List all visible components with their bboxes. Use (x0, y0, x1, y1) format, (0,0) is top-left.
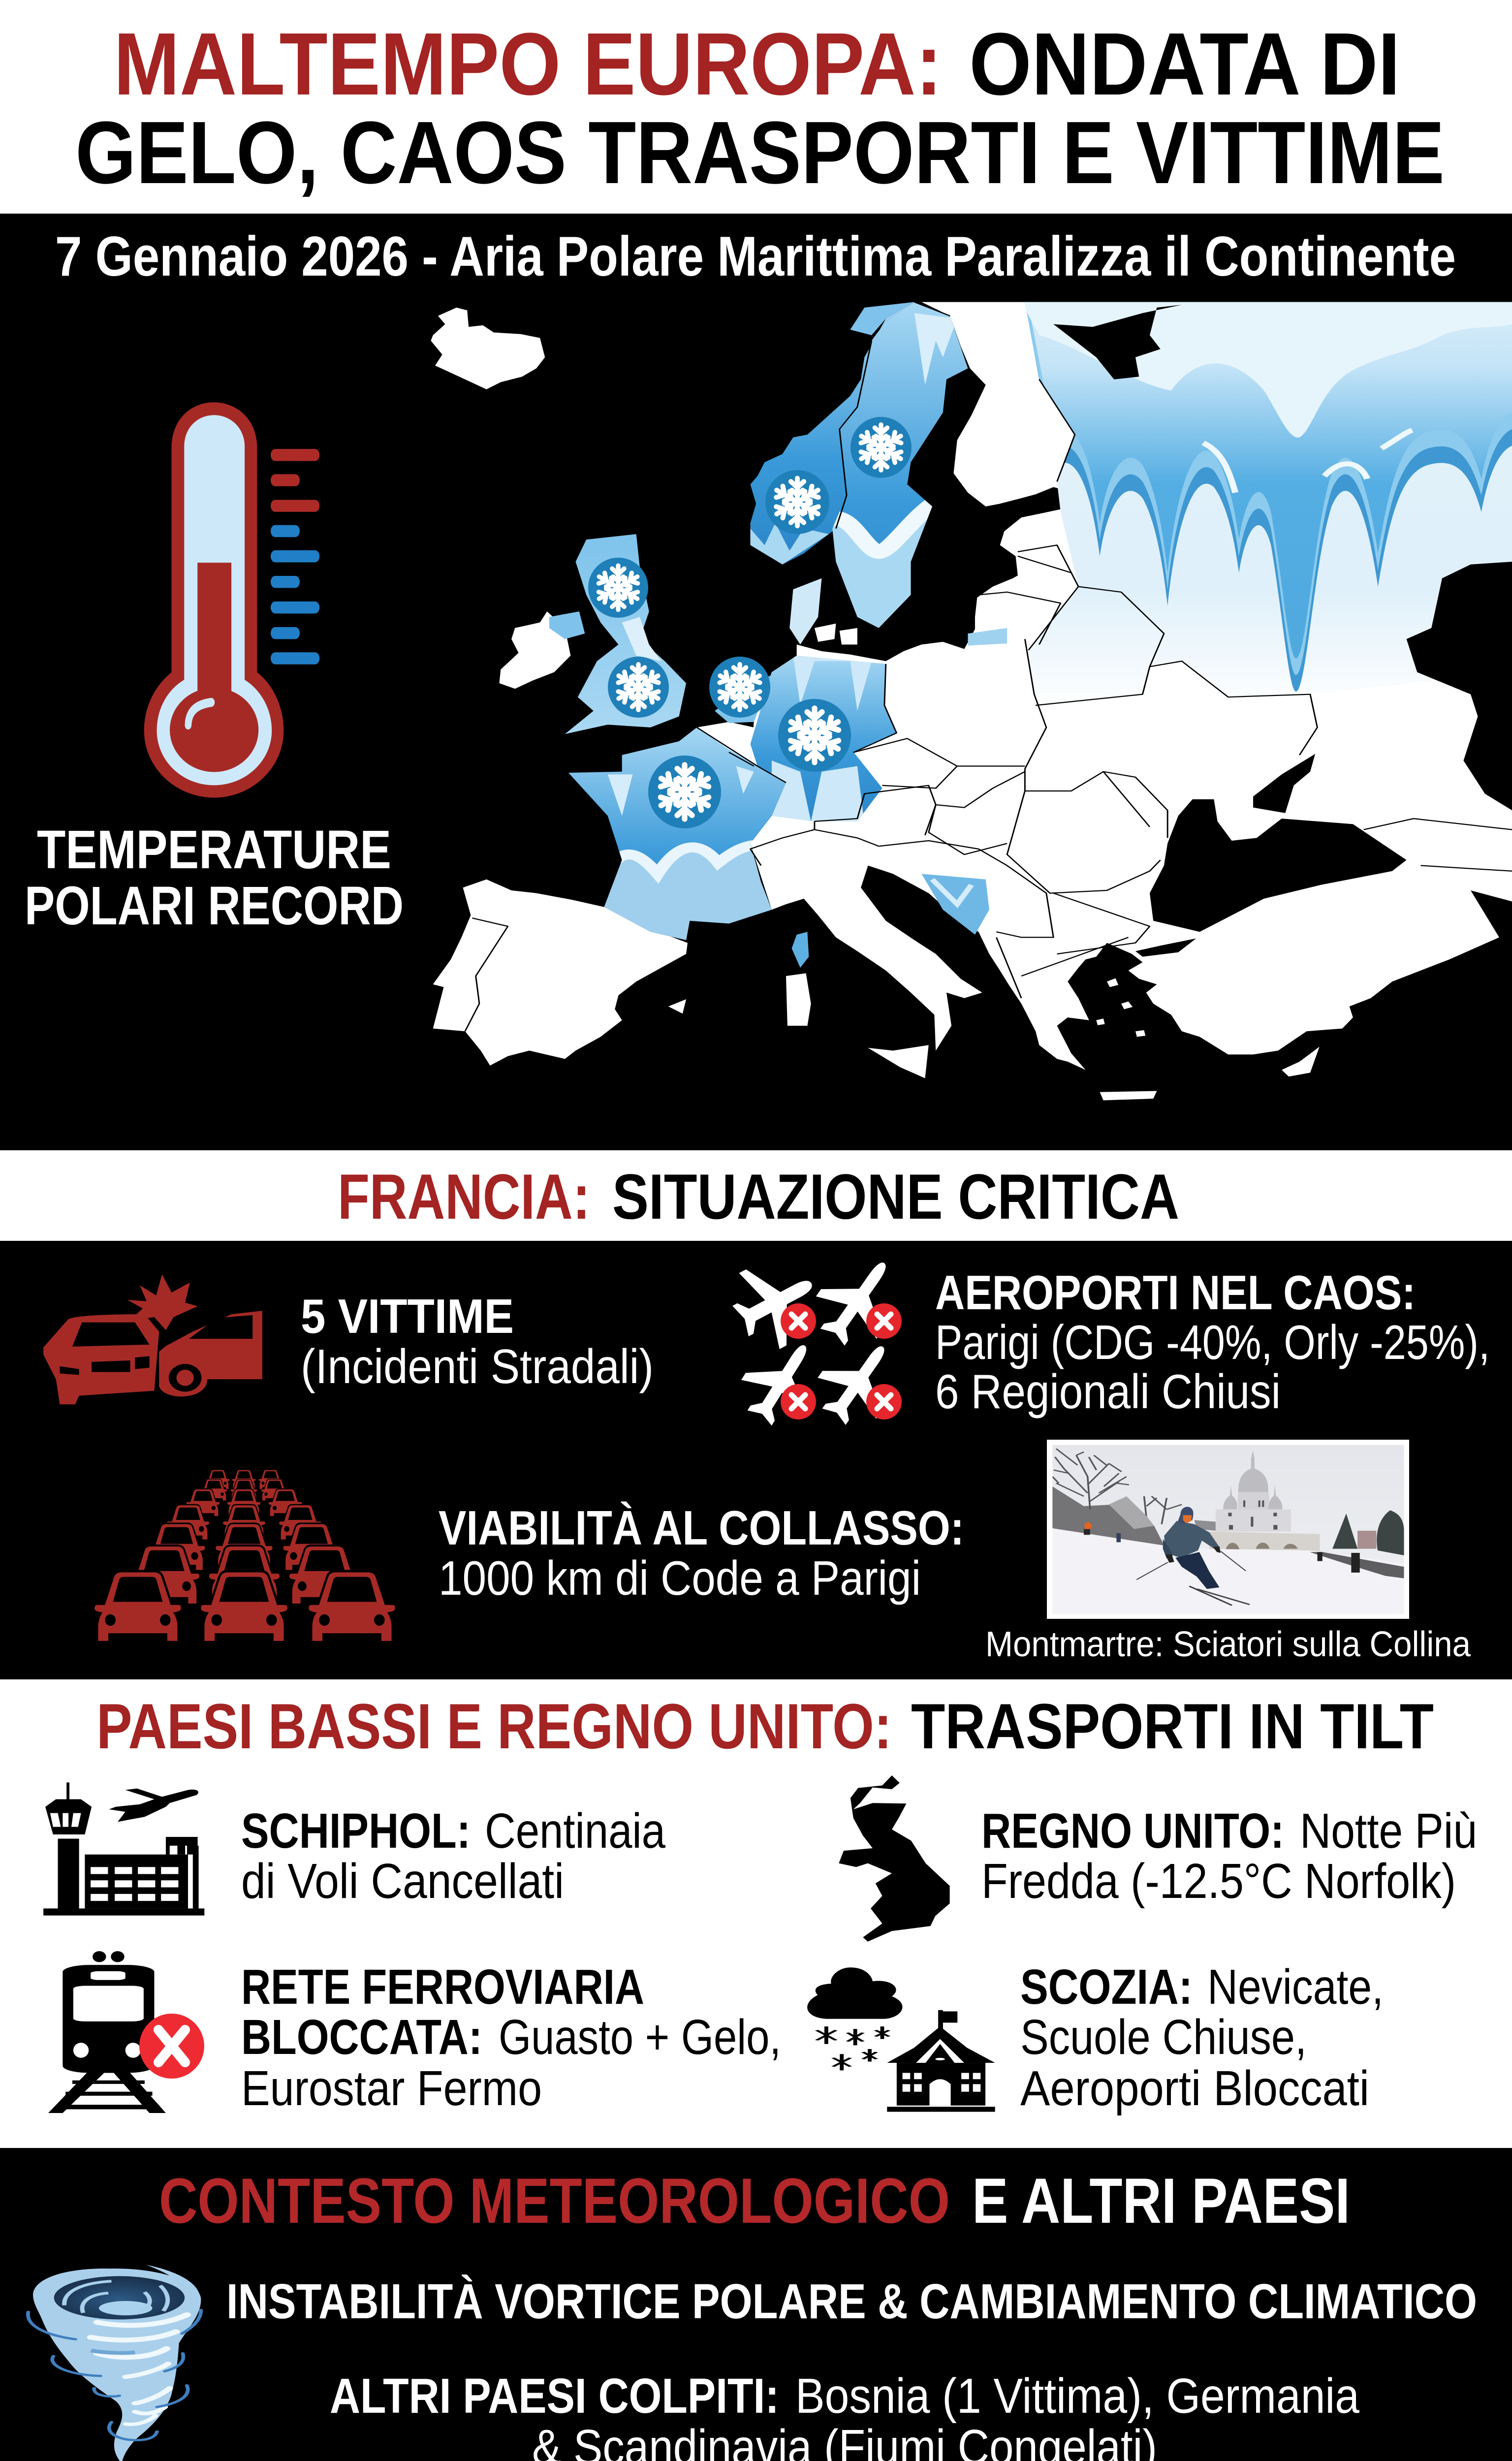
icon: cancelled planes (720, 1242, 914, 1437)
Sea of Marmara (1135, 939, 1196, 957)
thermometer label (25, 820, 404, 936)
heading: contesto: CONTESTO METEOROLOGICO (159, 2165, 950, 2237)
text: Schiphol: di Voli Cancellati (241, 1854, 564, 1909)
text: 5 vittime (301, 1289, 654, 1393)
Great Britain ice (565, 534, 686, 734)
Bosnia ice (921, 874, 989, 935)
icon: car crash (43, 1274, 262, 1404)
text: Schiphol: Centinaia (485, 1803, 665, 1859)
country borders (465, 302, 1512, 1031)
snowflake markers (588, 417, 912, 828)
text: aeroporti: AEROPORTI NEL CAOS: (935, 1265, 1416, 1320)
panel: contesto meteorologico (0, 2148, 1512, 2461)
text: altri paesi: Bosnia (1 Vittima), Germania (795, 2368, 1359, 2424)
text: Schiphol (241, 1803, 665, 1909)
panel: title (0, 0, 1512, 214)
text: rete ferroviaria: Guasto + Gelo, (499, 2010, 781, 2065)
icon: snow cloud and school (807, 1967, 995, 2112)
text: viabilita: 1000 km di Code a Parigi (439, 1551, 921, 1605)
Corsica (792, 932, 809, 968)
land: continental Europe (750, 302, 1512, 1070)
text: 5 vittime: (Incidenti Stradali) (301, 1339, 654, 1393)
Kaliningrad (968, 628, 1007, 646)
title line 1: MALTEMPO EUROPA: (114, 15, 942, 114)
text: altri paesi (330, 2368, 1359, 2461)
France ice (565, 725, 793, 948)
text: altri paesi: ALTRI PAESI COLPITI: (330, 2368, 779, 2424)
heading: contesto: E ALTRI PAESI (972, 2165, 1350, 2237)
Netherlands ice (715, 675, 772, 723)
heading: Francia: FRANCIA: (338, 1161, 590, 1232)
land: Iberia (433, 880, 688, 1066)
heading: Paesi Bassi: PAESI BASSI E REGNO UNITO: (96, 1690, 892, 1762)
text: Scozia: Aeroporti Bloccati (1020, 2061, 1369, 2116)
text: aeroporti: 6 Regionali Chiusi (935, 1364, 1281, 1419)
title line 1: ONDATA DI (969, 15, 1400, 114)
land: Denmark islands (815, 624, 857, 645)
Northern Ireland ice (549, 611, 585, 639)
text: rete ferroviaria: BLOCCATA: (241, 2010, 482, 2065)
thermometer label: POLARI RECORD (25, 876, 404, 936)
text: Regno Unito (981, 1803, 1477, 1909)
land: islands (668, 973, 1320, 1101)
map of Europe (431, 269, 1512, 1101)
text: Regno Unito: Notte Più (1300, 1803, 1477, 1859)
White Sea (1053, 305, 1182, 379)
text: viabilita: VIABILITÀ AL COLLASSO: (439, 1501, 964, 1555)
text: rete ferroviaria: RETE FERROVIARIA (241, 1959, 644, 2015)
thermometer label: TEMPERATURE (37, 820, 391, 880)
text: rete ferroviaria (241, 1959, 781, 2116)
text: viabilita (439, 1501, 964, 1605)
panel: map section (0, 214, 1512, 1150)
text: Scozia: SCOZIA: (1020, 1959, 1193, 2015)
text: aeroporti (935, 1265, 1490, 1419)
text: rete ferroviaria: Eurostar Fermo (241, 2061, 542, 2116)
icon: traffic jam (94, 1470, 396, 1642)
icon: thermometer (144, 402, 319, 798)
heading: Francia (338, 1161, 1179, 1232)
Germany ice (747, 653, 900, 824)
icon: tornado (28, 2265, 201, 2461)
panel: Paesi Bassi e Regno Unito (0, 1679, 1512, 2148)
text: Schiphol: SCHIPHOL: (241, 1803, 471, 1859)
text: 5 vittime: 5 VITTIME (301, 1289, 514, 1343)
land: Iceland (431, 308, 545, 389)
photo: skier at Montmartre (1047, 1440, 1409, 1619)
Sweden ice (832, 302, 968, 628)
heading: Francia: SITUAZIONE CRITICA (612, 1161, 1179, 1232)
Caspian Sea (1407, 562, 1512, 810)
text: Scozia: Nevicate, (1207, 1959, 1384, 2015)
Russia ice region (1025, 302, 1512, 692)
text: Scozia: Scuole Chiuse, (1020, 2010, 1307, 2065)
land: Aegean islands (1096, 978, 1145, 1037)
land: Ireland (499, 611, 570, 689)
icon: blocked train (48, 1951, 204, 2113)
icon: airport (43, 1782, 204, 1916)
Norway ice (750, 302, 914, 565)
photo caption: Montmartre: Sciatori sulla Collina (985, 1625, 1471, 1664)
text: Regno Unito: Fredda (-12.5°C Norfolk) (981, 1854, 1456, 1909)
text: Scozia (1020, 1959, 1384, 2116)
heading: Paesi Bassi: TRASPORTI IN TILT (911, 1690, 1434, 1762)
land: Belgium (697, 722, 757, 766)
text: Regno Unito: REGNO UNITO: (981, 1803, 1284, 1859)
panel: Francia details (43, 1262, 1486, 1657)
icon: UK silhouette (839, 1775, 950, 1942)
panel: heading Francia (0, 1150, 1512, 1241)
Denmark ice (789, 578, 821, 645)
Sea of Azov (1253, 754, 1315, 813)
Black Sea (1150, 799, 1407, 932)
